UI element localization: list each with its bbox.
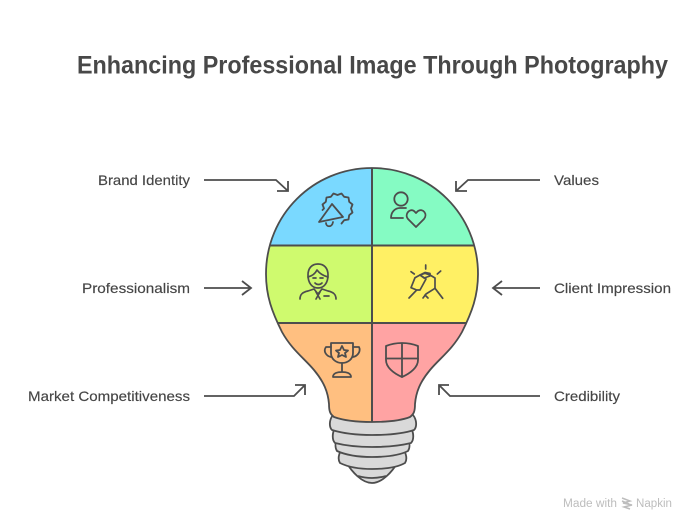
icon: shield — [386, 343, 418, 377]
panel: client impression segment — [372, 246, 484, 323]
watermark: made with napkin: Napkin — [636, 498, 672, 510]
arrow: client impression — [493, 281, 540, 295]
lightbulb — [260, 160, 484, 425]
arrow: values — [456, 180, 540, 191]
label: brand identity: Brand Identity — [98, 172, 190, 188]
icon: trophy — [325, 343, 360, 377]
bulb dividers — [270, 168, 474, 422]
watermark: made with napkin: Made with — [563, 498, 617, 510]
icon: person with heart — [391, 192, 425, 227]
arrow: market competitiveness — [204, 385, 305, 396]
bulb screw base — [330, 415, 416, 483]
label: credibility: Credibility — [554, 388, 620, 404]
arrow: professionalism — [204, 281, 251, 295]
arrow: brand identity — [204, 180, 288, 191]
icon: napkin logo — [622, 498, 632, 509]
panel: brand identity segment — [271, 168, 371, 244]
icon: megaphone badge — [319, 194, 352, 226]
panel: credibility segment — [373, 324, 465, 422]
label: values: Values — [554, 172, 599, 188]
label: professionalism: Professionalism — [82, 280, 190, 296]
panel: professionalism segment — [260, 246, 372, 323]
panel: values segment — [373, 168, 473, 244]
label: market competitiveness: Market Competitiveness — [28, 388, 190, 404]
bulb outline — [266, 168, 478, 422]
title: Enhancing Professional Image Through Photography — [77, 52, 668, 80]
watermark: made with napkin — [563, 498, 672, 510]
icon: professional man — [300, 264, 336, 299]
icon: handshake fists — [409, 265, 443, 298]
arrow: credibility — [439, 385, 540, 396]
label: client impression: Client Impression — [554, 280, 671, 296]
panel: market competitiveness segment — [279, 324, 371, 422]
